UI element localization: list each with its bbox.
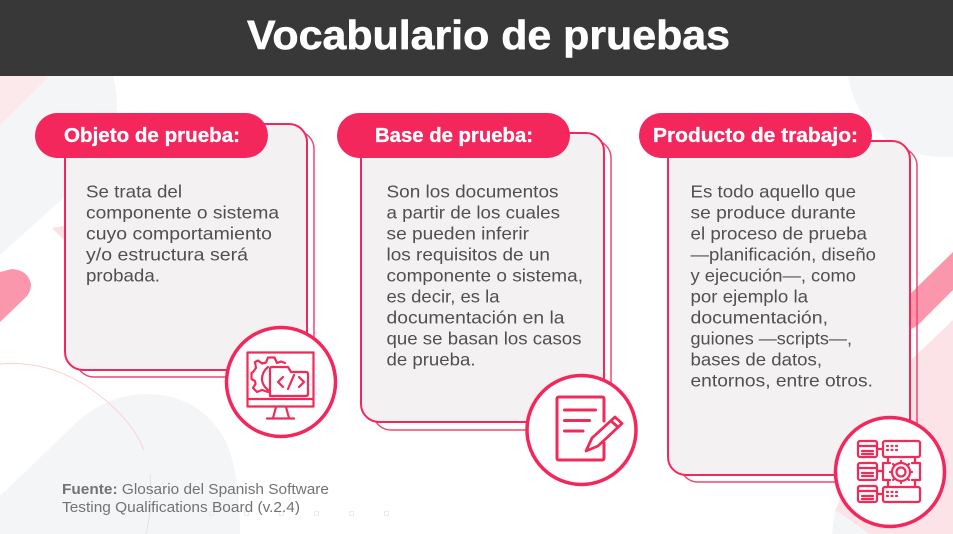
panel: base de prueba — [337, 113, 636, 484]
text block — [386, 182, 583, 370]
source note: Fuente: Glosario del Spanish Software — [62, 482, 329, 498]
text block: documentación, — [690, 308, 828, 328]
icon: server rows with gear — [836, 418, 944, 526]
text block: y ejecución—, como — [690, 266, 856, 286]
panel: producto de trabajo — [639, 113, 944, 526]
header bar — [0, 0, 953, 76]
text block: probada. — [86, 266, 160, 286]
text block: —planificación, diseño — [690, 245, 876, 265]
panel: objeto de prueba — [35, 113, 336, 436]
icon: document and pencil — [527, 376, 636, 484]
text block — [86, 182, 279, 286]
text block: se pueden inferir — [386, 224, 529, 244]
text block: componente o sistema, — [386, 266, 583, 286]
text block: por ejemplo la — [690, 287, 808, 307]
text block: bases de datos, — [690, 350, 822, 370]
text block: Es todo aquello que — [690, 182, 856, 202]
text block: componente o sistema — [86, 203, 279, 223]
heading pill — [35, 113, 268, 158]
text block: y/o estructura será — [86, 245, 248, 265]
text block: cuyo comportamiento — [86, 224, 272, 244]
text block: documentación en la — [386, 308, 565, 328]
text block: entornos, entre otros. — [690, 371, 873, 391]
heading pill — [337, 113, 570, 158]
heading pill — [639, 113, 872, 158]
heading pill: Producto de trabajo: — [653, 125, 858, 147]
text block: Se trata del — [86, 182, 182, 202]
text block: guiones —scripts—, — [690, 329, 852, 349]
heading pill: Base de prueba: — [375, 125, 533, 147]
text block: de prueba. — [386, 350, 476, 370]
text block: que se basan los casos — [386, 329, 582, 349]
text block: los requisitos de un — [386, 245, 550, 265]
text block: Son los documentos — [386, 182, 559, 202]
text block — [690, 182, 876, 391]
text block: se produce durante — [690, 203, 856, 223]
source note — [62, 482, 329, 516]
text block: es decir, es la — [386, 287, 500, 307]
heading pill: Objeto de prueba: — [64, 125, 240, 147]
icon: monitor with code folder — [226, 328, 336, 436]
source note: Testing Qualifications Board (v.2.4) — [62, 500, 300, 516]
title: Vocabulario de pruebas — [247, 12, 730, 58]
text block: a partir de los cuales — [386, 203, 560, 223]
text block: el proceso de prueba — [690, 224, 867, 244]
